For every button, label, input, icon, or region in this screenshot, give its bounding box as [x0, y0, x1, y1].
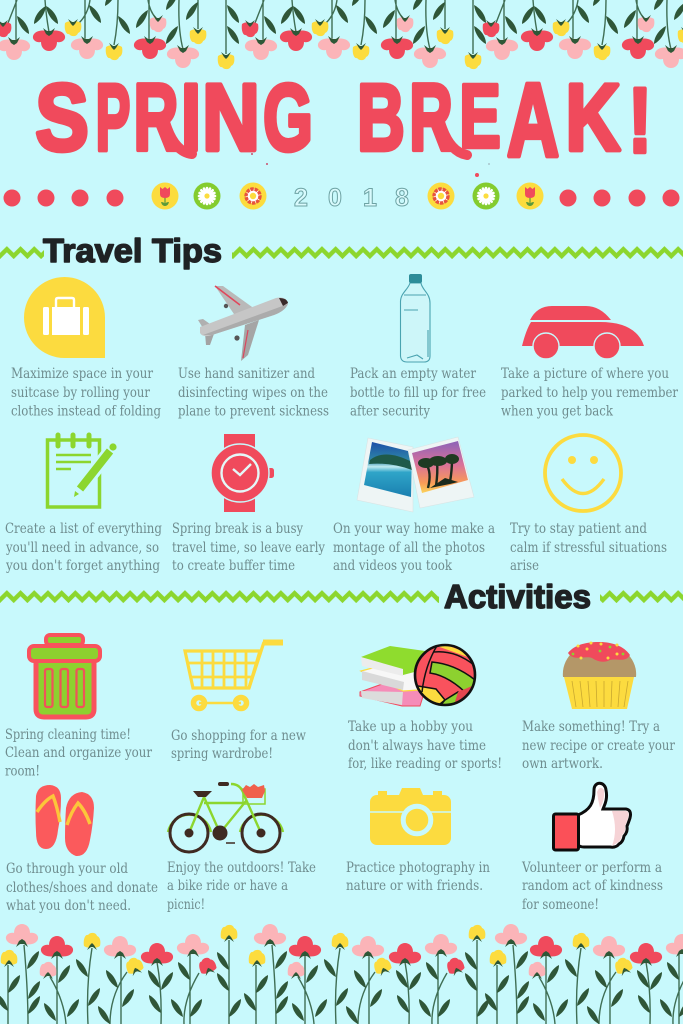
- text: montage of all the photos: [333, 540, 485, 556]
- text: for, like reading or sports!: [348, 756, 502, 772]
- text: to create buffer time: [172, 558, 295, 574]
- tip: car: [501, 306, 678, 420]
- text: a bike ride or have a: [167, 878, 288, 894]
- tip: smile: [510, 435, 667, 574]
- text: Maximize space in your: [11, 366, 153, 382]
- year 2018: 0: [328, 184, 342, 212]
- text: Make something! Try a: [522, 719, 660, 735]
- text: arise: [510, 558, 539, 574]
- title: Spring Break!: E: [459, 67, 501, 167]
- title: Spring Break!: R: [134, 64, 178, 170]
- activity: cleaning: [5, 635, 152, 780]
- icon: books and volleyball: [360, 644, 478, 712]
- title: Spring Break!: K: [566, 65, 620, 171]
- text: and videos you took: [333, 558, 453, 574]
- tip: list: [5, 435, 162, 574]
- text: for someone!: [522, 897, 599, 913]
- icon: trash can: [29, 635, 100, 717]
- year 2018: 2: [294, 184, 308, 212]
- text: own artwork.: [522, 756, 603, 772]
- tip: photos: [333, 437, 495, 574]
- year 2018: 1: [363, 184, 377, 212]
- text: [346, 860, 490, 894]
- text: [521, 860, 663, 913]
- text: Volunteer or perform a: [521, 860, 662, 876]
- icon: bicycle: [168, 782, 283, 852]
- icon: airplane: [198, 286, 288, 361]
- text: [171, 728, 306, 762]
- text: [5, 521, 162, 574]
- icon: water bottle: [400, 274, 430, 362]
- text: Spring break is a busy: [172, 521, 303, 537]
- text: travel time, so leave early: [172, 540, 325, 556]
- title: Spring Break!: N: [202, 63, 260, 171]
- text: Spring cleaning time!: [5, 727, 131, 743]
- text: [6, 861, 158, 914]
- text: Enjoy the outdoors! Take: [167, 860, 316, 876]
- year 2018: 8: [395, 184, 409, 212]
- text: [333, 521, 495, 574]
- text: [522, 719, 675, 772]
- text: clothes/shoes and donate: [6, 880, 158, 896]
- text: plane to prevent sickness: [178, 404, 329, 420]
- title: Spring Break!: !: [628, 70, 652, 172]
- icon: camera: [370, 788, 451, 845]
- text: disinfecting wipes on the: [178, 385, 328, 401]
- text: you'll need in advance, so: [5, 540, 159, 556]
- text: spring wardrobe!: [171, 746, 273, 762]
- divider: activities zigzag: [0, 590, 683, 604]
- icon: smiley face: [545, 435, 621, 511]
- title: Spring Break!: G: [263, 66, 313, 171]
- icon: cupcake: [563, 642, 636, 709]
- icon: thumbs up: [554, 783, 630, 850]
- activity: shopping: [171, 642, 306, 762]
- title: Spring Break!: I: [181, 64, 201, 170]
- text: Try to stay patient and: [510, 521, 647, 537]
- text: [167, 860, 316, 913]
- activity: hobby: [348, 644, 502, 772]
- icon: notepad and pencil: [48, 435, 117, 507]
- text: [11, 366, 161, 420]
- text: what you don't need.: [6, 898, 131, 914]
- text: when you get back: [501, 404, 614, 420]
- text: [348, 719, 502, 772]
- text: [172, 521, 325, 574]
- dots left: [4, 190, 124, 206]
- title: Spring Break!: A: [507, 62, 559, 178]
- growing flowers border: [0, 924, 683, 1024]
- text: suitcase by rolling your: [11, 385, 150, 401]
- title: Spring Break!: [35, 62, 652, 178]
- text: Practice photography in: [346, 860, 490, 876]
- text: Create a list of everything: [5, 521, 162, 537]
- title: Spring Break!: R: [409, 64, 453, 170]
- text: Take up a hobby you: [348, 719, 473, 735]
- title: Spring Break!: B: [357, 65, 405, 171]
- icon: wristwatch: [211, 434, 274, 512]
- text: Go shopping for a new: [171, 728, 306, 744]
- text: random act of kindness: [522, 878, 663, 894]
- text: don't always have time: [348, 738, 486, 754]
- heading: Activities: Activities: [444, 578, 591, 615]
- icon: car: [522, 306, 644, 359]
- text: bottle to fill up for free: [350, 385, 486, 401]
- tip: bottle: [350, 274, 486, 420]
- text: you don't forget anything: [5, 558, 160, 574]
- text: [510, 521, 667, 574]
- text: clothes instead of folding: [11, 404, 161, 420]
- activity: outdoors: [167, 782, 316, 913]
- text: Clean and organize your: [5, 745, 152, 761]
- text: Pack an empty water: [350, 366, 476, 382]
- activity: make something: [522, 642, 675, 772]
- tip: plane: [178, 286, 329, 420]
- text: Go through your old: [6, 861, 128, 877]
- text: room!: [5, 764, 40, 780]
- text: after security: [350, 404, 430, 420]
- activity: volunteer: [521, 783, 663, 913]
- icon: suitcase: [24, 277, 105, 358]
- icon: flip flops: [36, 785, 94, 856]
- text: [501, 366, 678, 420]
- title: Spring Break!: S: [35, 63, 89, 171]
- text: [5, 727, 152, 780]
- tip: suitcase: [11, 277, 161, 420]
- icon: polaroid photos: [357, 437, 474, 512]
- text: nature or with friends.: [346, 878, 483, 894]
- divider: travel tips zigzag: [0, 246, 683, 260]
- year 2018: [294, 184, 409, 212]
- flower badges: [152, 182, 544, 210]
- hanging flowers border: [0, 0, 683, 69]
- text: On your way home make a: [333, 521, 495, 537]
- heading: Travel Tips: Travel Tips: [43, 232, 222, 269]
- text: [350, 366, 486, 420]
- dots right: [560, 190, 680, 206]
- text: Use hand sanitizer and: [178, 366, 315, 382]
- title: Spring Break!: P: [96, 66, 130, 171]
- text: picnic!: [167, 897, 205, 913]
- text: [178, 366, 329, 420]
- activity: donate: [6, 785, 158, 914]
- icon: shopping cart: [185, 642, 283, 708]
- tip: watch: [172, 434, 325, 574]
- activity: photography: [346, 788, 490, 894]
